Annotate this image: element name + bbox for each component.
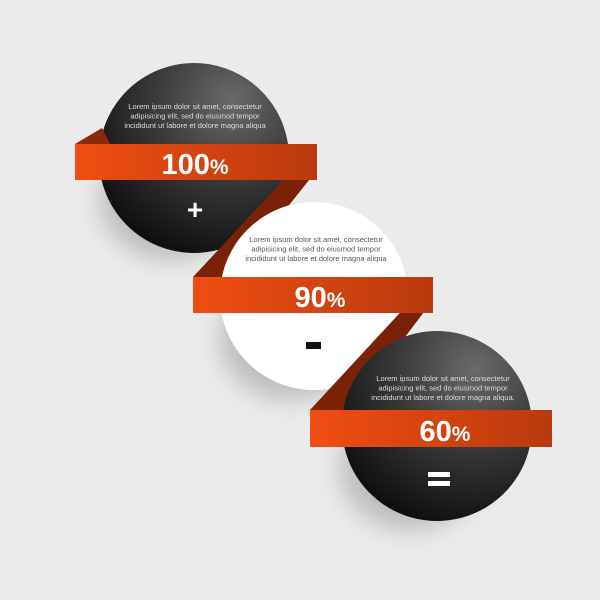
icon: plus: +: [187, 194, 203, 225]
ribbon 1: 100%: 100%: [161, 149, 229, 181]
ribbon 2: 90%: [193, 277, 433, 314]
icon: minus: [306, 342, 321, 349]
fold 2: [310, 277, 433, 410]
fold top-left: [75, 128, 110, 144]
text block 3: adipisicing elit, sed do eiusmod tempor: [378, 384, 508, 392]
circle 2: [220, 202, 408, 390]
ribbon 3: 60%: 60%: [420, 416, 471, 448]
text block 1: incididunt ut labore et dolore magna aliqua: [124, 121, 266, 130]
icon: equals: [428, 472, 450, 486]
ribbon 2: 90%: 90%: [295, 282, 346, 314]
text block 1: Lorem ipsum dolor sit amet, consectetur: [128, 102, 262, 111]
fold 1: [193, 144, 317, 277]
text block 3: incididunt ut labore et dolore magna aliqua.: [371, 393, 515, 402]
shadows: [100, 140, 480, 530]
circle 1: [99, 63, 289, 253]
ribbon 1: 100%: [75, 144, 317, 181]
text block 1: adipisicing elit, sed do eiusmod tempor: [130, 112, 260, 120]
text block 2: incididunt ut labore et dolore magna aliqua: [245, 254, 387, 263]
text block 3: Lorem ipsum dolor sit amet, consectetur: [376, 374, 510, 383]
text block 2: Lorem ipsum dolor sit amet, consectetur: [249, 235, 383, 244]
circle 3: [342, 331, 532, 521]
text block 2: adipisicing elit, sed do eiusmod tempor: [251, 244, 381, 254]
ribbon 3: 60%: [310, 410, 552, 448]
